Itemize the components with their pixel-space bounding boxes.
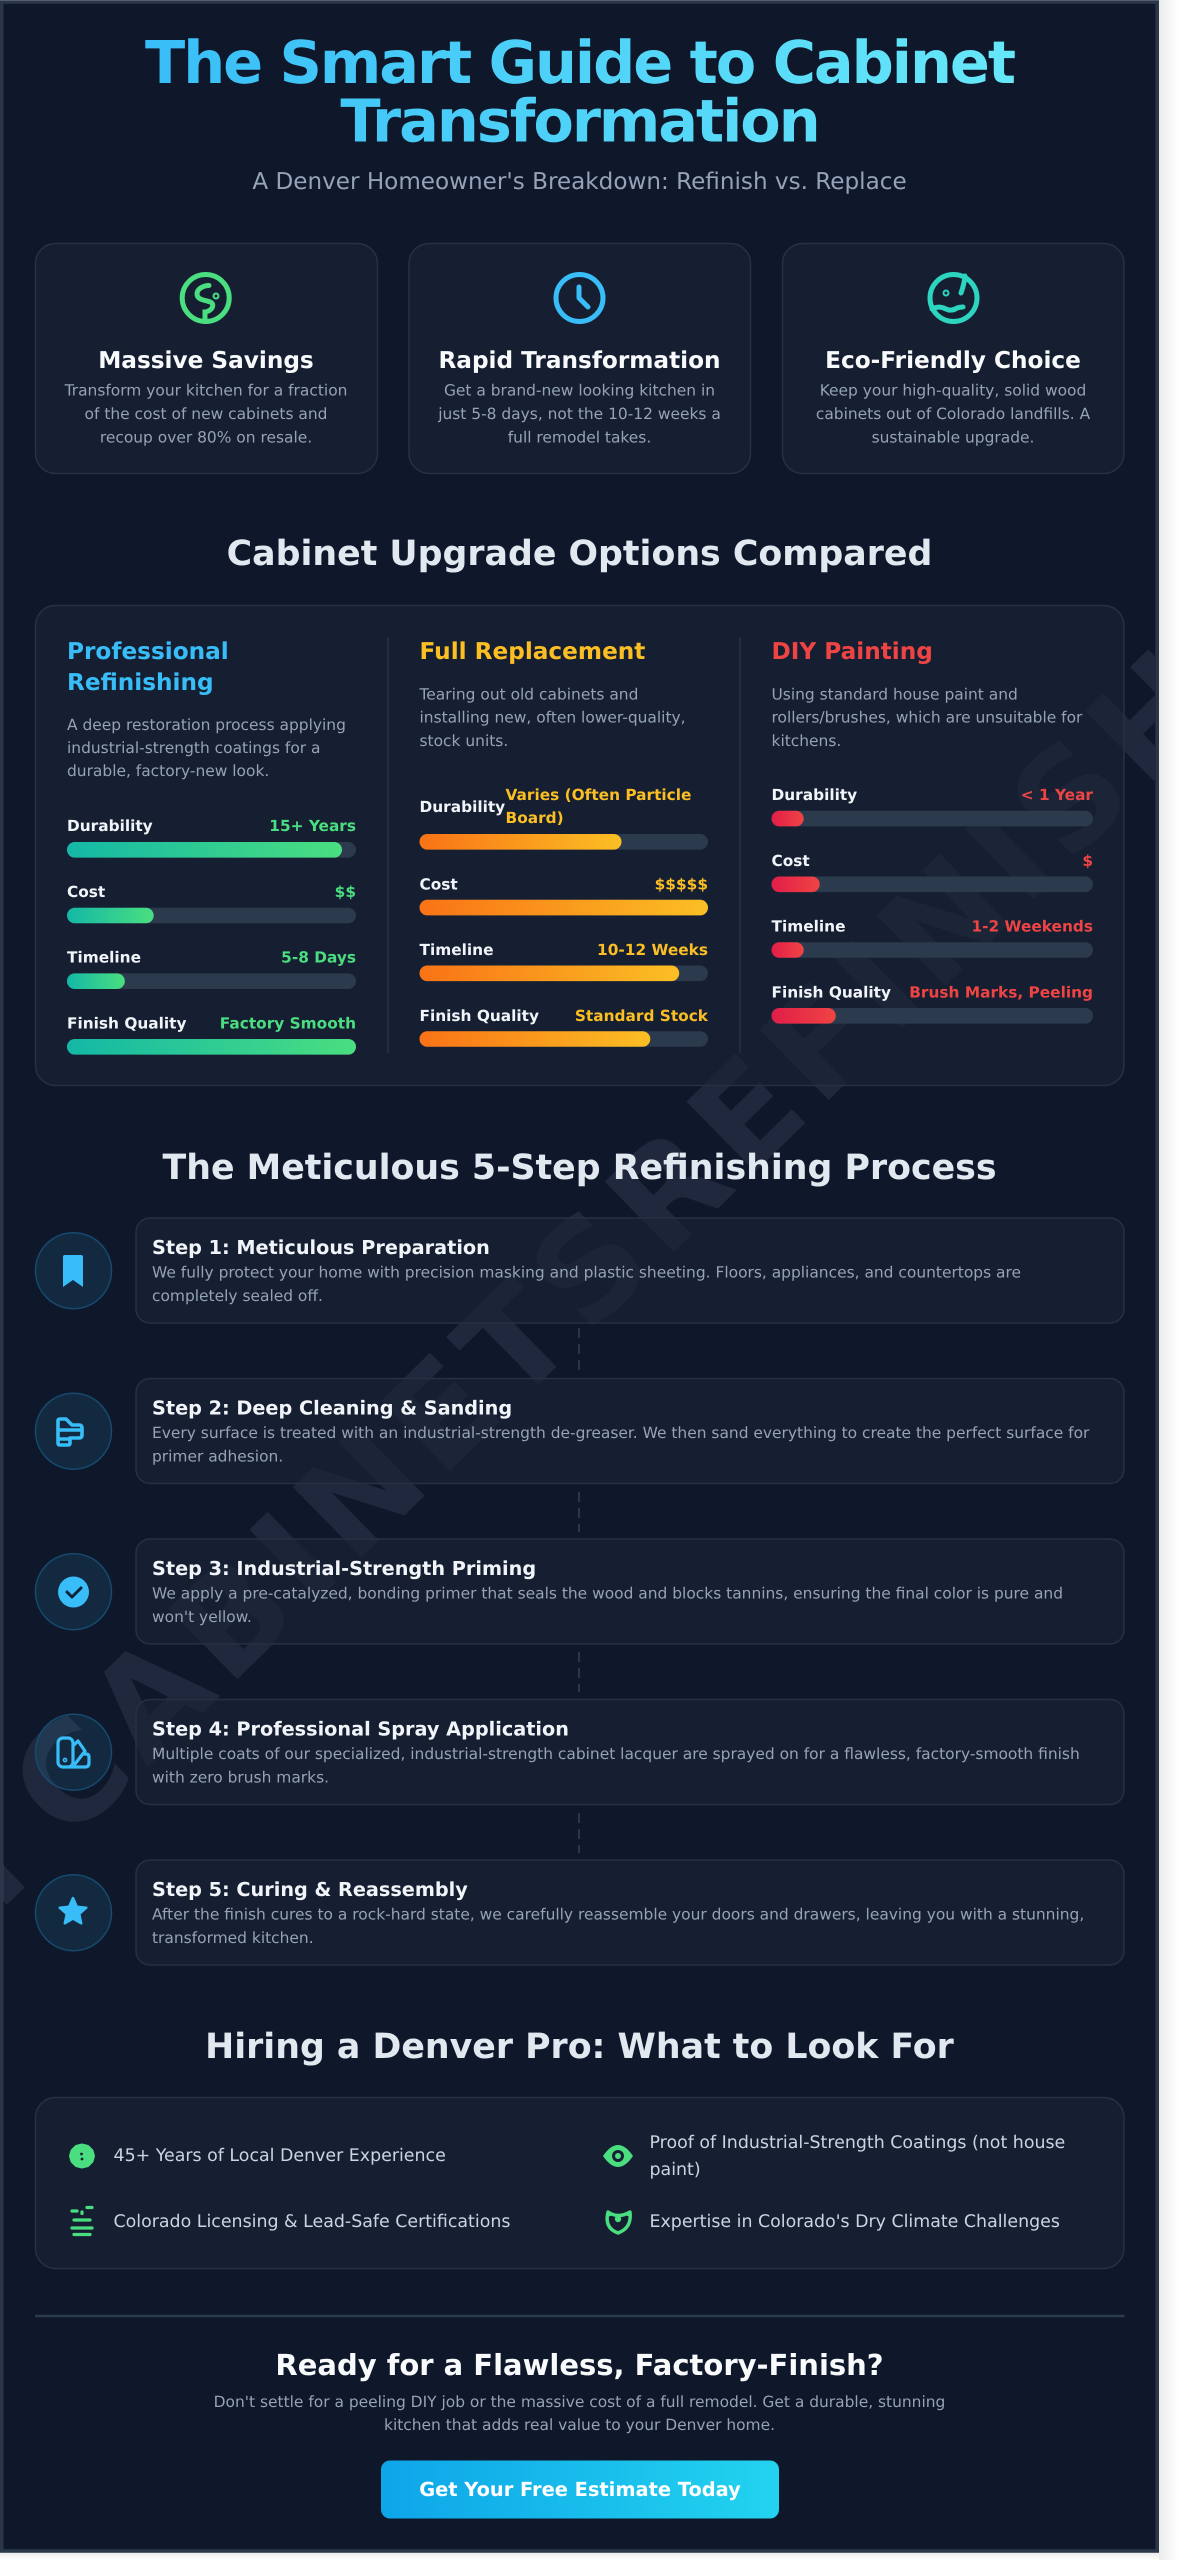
cta text: Don't settle for a peeling DIY job or the massive cost of a full remodel. Get a durable, stunning xyxy=(214,2393,945,2411)
meter: cost xyxy=(772,852,1093,892)
meter: cost: Cost xyxy=(67,883,105,901)
icon: dollar circle xyxy=(182,274,229,322)
heading: options compared: Cabinet Upgrade Options Compared xyxy=(227,534,932,574)
step 1 xyxy=(36,1218,1124,1323)
description: Transform your kitchen for a fraction xyxy=(64,382,347,400)
meter: finish quality: Finish Quality xyxy=(67,1014,186,1032)
column description: stock units. xyxy=(420,732,508,750)
meter: finish quality xyxy=(772,984,1093,1024)
heading: Eco-Friendly Choice xyxy=(825,347,1081,374)
column description xyxy=(67,716,346,780)
step card: primer adhesion. xyxy=(152,1448,283,1466)
step card: After the finish cures to a rock-hard state, we carefully reassemble your doors and drawers, leaving you with a stunning, xyxy=(152,1906,1084,1924)
panel: eco-friendly choice xyxy=(782,244,1124,474)
description: Get a brand-new looking kitchen in xyxy=(444,382,715,400)
step 5 xyxy=(36,1860,1124,1965)
panel: comparison xyxy=(36,606,1124,1086)
description xyxy=(816,382,1091,446)
description: full remodel takes. xyxy=(508,428,651,446)
description: of the cost of new cabinets and xyxy=(85,405,327,423)
meter: durability: Board) xyxy=(506,809,564,827)
description xyxy=(437,382,721,446)
icon: bookmark xyxy=(36,1233,112,1309)
column heading xyxy=(67,638,229,696)
meter: cost xyxy=(420,876,708,915)
column: professional refinishing xyxy=(67,638,356,1055)
step card: Step 2: Deep Cleaning & Sanding xyxy=(152,1396,512,1420)
description: cabinets out of Colorado landfills. A xyxy=(816,405,1091,423)
meter: finish quality: Standard Stock xyxy=(575,1007,709,1025)
step 2 xyxy=(36,1378,1124,1484)
step card: Step 3: Industrial-Strength Priming xyxy=(152,1557,536,1580)
cta button: Get Your Free Estimate Today xyxy=(419,2478,741,2501)
description: just 5-8 days, not the 10-12 weeks a xyxy=(437,405,721,423)
step card xyxy=(136,1378,1124,1484)
meter: finish quality xyxy=(67,1014,356,1055)
icon: certificate list xyxy=(72,2208,92,2234)
meter: timeline: 1-2 Weekends xyxy=(972,918,1093,936)
icon: badge xyxy=(70,2144,94,2168)
step card xyxy=(136,1860,1124,1965)
column: diy painting xyxy=(772,638,1093,1024)
meter: timeline xyxy=(772,918,1093,958)
heading: Massive Savings xyxy=(98,347,314,374)
step card: We fully protect your home with precision masking and plastic sheeting. Floors, appliances, and countertops are xyxy=(152,1264,1021,1282)
connector lines xyxy=(578,1328,580,1853)
meter: cost: $$$$$ xyxy=(655,876,708,894)
title xyxy=(145,28,1015,156)
description: Keep your high-quality, solid wood xyxy=(820,382,1086,400)
column heading: Refinishing xyxy=(67,669,214,696)
meter: durability: Durability xyxy=(67,817,153,835)
step card: Every surface is treated with an industrial-strength de-greaser. We then sand everything to create the perfect surface for xyxy=(152,1424,1090,1442)
title: Transformation xyxy=(340,86,819,156)
meter: durability xyxy=(772,786,1093,826)
column description: industrial-strength coatings for a xyxy=(67,739,320,757)
heading: hiring: Hiring a Denver Pro: What to Look For xyxy=(205,2027,955,2067)
step card xyxy=(136,1700,1124,1804)
item: licensing: Colorado Licensing & Lead-Safe Certifications xyxy=(114,2212,510,2232)
description xyxy=(64,382,347,446)
column description: installing new, often lower-quality, xyxy=(420,708,686,726)
step card: won't yellow. xyxy=(152,1608,252,1626)
step 3 xyxy=(36,1539,1124,1644)
step card: completely sealed off. xyxy=(152,1287,323,1305)
column heading: DIY Painting xyxy=(772,638,933,665)
column description: durable, factory-new look. xyxy=(67,762,269,780)
meter: timeline: 10-12 Weeks xyxy=(597,941,708,959)
meter: finish quality xyxy=(420,1007,709,1047)
meter: cost: Cost xyxy=(772,852,810,870)
column description: Using standard house paint and xyxy=(772,685,1018,703)
column description xyxy=(418,685,686,750)
icon: color swatch xyxy=(36,1714,112,1790)
meter: durability xyxy=(67,817,356,858)
description: recoup over 80% on resale. xyxy=(100,428,312,446)
step card: transformed kitchen. xyxy=(152,1929,314,1947)
meter: cost xyxy=(67,883,356,923)
column description: kitchens. xyxy=(772,732,841,750)
column description xyxy=(772,685,1083,750)
meter: finish quality: Finish Quality xyxy=(772,984,891,1002)
subtitle: A Denver Homeowner's Breakdown: Refinish vs. Replace xyxy=(252,169,907,195)
meter: durability: Varies (Often Particle xyxy=(506,786,691,804)
panel: massive savings xyxy=(36,244,378,474)
column: full replacement xyxy=(418,638,709,1047)
column description: Tearing out old cabinets and xyxy=(418,685,638,703)
step card xyxy=(136,1539,1124,1644)
item: climate: Expertise in Colorado's Dry Climate Challenges xyxy=(650,2212,1060,2232)
icon: star xyxy=(36,1875,112,1951)
meter: timeline xyxy=(420,941,708,981)
description: sustainable upgrade. xyxy=(872,428,1034,446)
panel: hiring checklist xyxy=(36,2098,1124,2268)
icon: cleaning tool xyxy=(36,1393,112,1469)
meter: durability xyxy=(420,786,708,850)
meter: timeline: Timeline xyxy=(67,949,141,967)
meter: durability: Durability xyxy=(772,786,857,804)
meter: timeline: Timeline xyxy=(420,941,493,959)
column description: A deep restoration process applying xyxy=(67,716,346,734)
meter: cost: Cost xyxy=(420,876,458,894)
cta button xyxy=(381,2460,779,2518)
item: experience: 45+ Years of Local Denver Experience xyxy=(114,2146,446,2166)
step card: Step 4: Professional Spray Application xyxy=(152,1718,569,1740)
cta text xyxy=(214,2393,945,2434)
step card: with zero brush marks. xyxy=(152,1768,329,1786)
column heading: Professional xyxy=(67,638,229,665)
heading: Rapid Transformation xyxy=(438,347,721,374)
title: The Smart Guide to Cabinet xyxy=(145,28,1015,97)
icon: eco face xyxy=(930,274,977,322)
meter: cost: $$ xyxy=(335,883,356,901)
column heading: Full Replacement xyxy=(420,638,645,665)
step card xyxy=(136,1218,1124,1323)
panel: rapid transformation xyxy=(409,244,750,474)
meter: finish quality: Brush Marks, Peeling xyxy=(909,984,1093,1002)
icon: clock xyxy=(556,274,603,322)
item: licensing xyxy=(72,2208,510,2234)
icon: check circle xyxy=(36,1554,112,1630)
meter: timeline xyxy=(67,949,356,989)
meter: cost: $ xyxy=(1082,852,1093,870)
meter: durability: < 1 Year xyxy=(1021,786,1093,804)
meter: finish quality: Factory Smooth xyxy=(220,1014,356,1032)
item: coatings: paint) xyxy=(650,2160,701,2180)
meter: timeline: Timeline xyxy=(772,918,845,936)
meter: durability: 15+ Years xyxy=(269,817,356,835)
cta heading: Ready for a Flawless, Factory-Finish? xyxy=(275,2348,884,2382)
call to action xyxy=(214,2348,945,2518)
icon: shield xyxy=(607,2211,631,2233)
icon: eye xyxy=(603,2145,633,2167)
heading: process: The Meticulous 5-Step Refinishing Process xyxy=(162,1148,996,1188)
meter: finish quality: Finish Quality xyxy=(420,1007,539,1025)
meter: durability: Durability xyxy=(420,798,505,816)
cta text: kitchen that adds real value to your Denver home. xyxy=(384,2416,775,2434)
meter: timeline: 5-8 Days xyxy=(281,949,356,967)
step card: Step 5: Curing & Reassembly xyxy=(152,1878,468,1901)
step 4 xyxy=(36,1700,1124,1804)
column description: rollers/brushes, which are unsuitable for xyxy=(772,708,1083,726)
step card: We apply a pre-catalyzed, bonding primer that seals the wood and blocks tannins, ensuring the final color is pure and xyxy=(152,1585,1063,1603)
item: coatings: Proof of Industrial-Strength Coatings (not house xyxy=(650,2133,1065,2153)
step card: Step 1: Meticulous Preparation xyxy=(152,1236,490,1259)
item: coatings xyxy=(603,2133,1065,2180)
step card: Multiple coats of our specialized, industrial-strength cabinet lacquer are sprayed on for a flawless, factory-smooth finish xyxy=(152,1745,1080,1763)
